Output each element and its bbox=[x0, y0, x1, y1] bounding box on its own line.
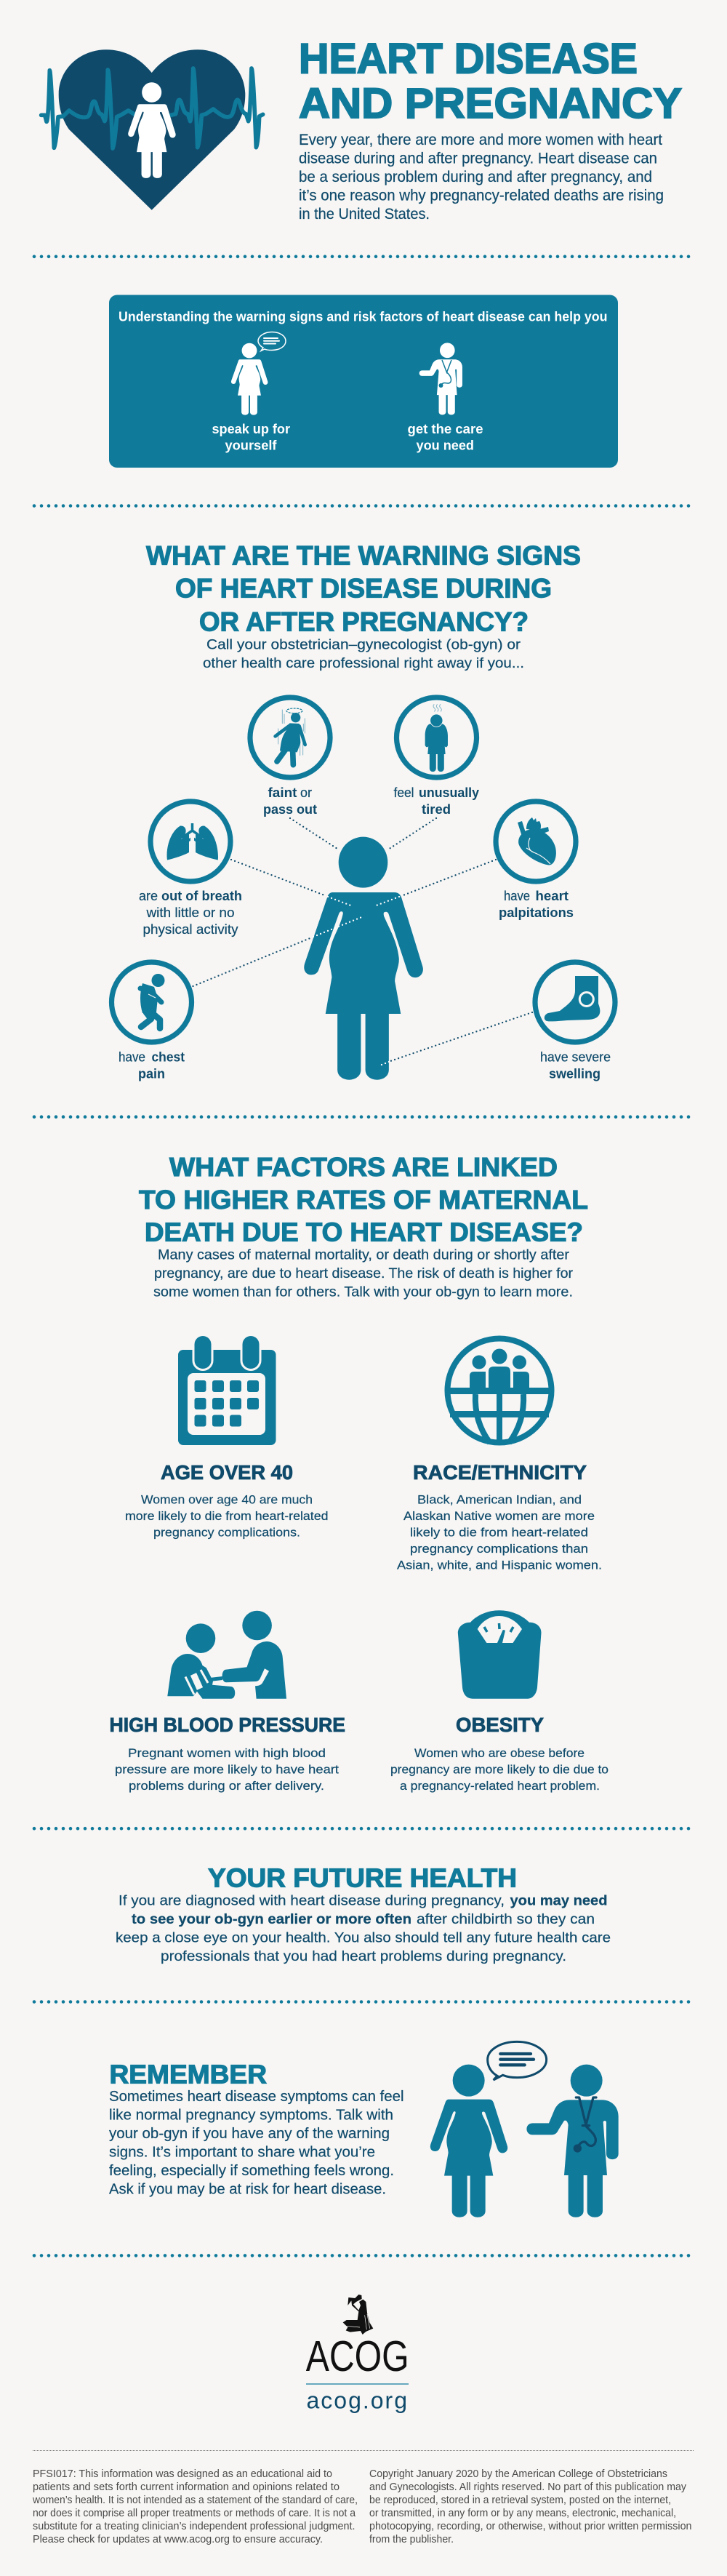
intro paragraph: be a serious problem during and after pregnancy, and bbox=[299, 169, 652, 185]
remember text: like normal pregnancy symptoms. Talk with bbox=[109, 2106, 393, 2124]
heading: warning signs: OR AFTER PREGNANCY? bbox=[199, 607, 529, 637]
footer: disclaimer: nor does it comprise all proper treatments or methods of care. It is not a bbox=[33, 2508, 356, 2519]
label: get the care you need: you need bbox=[416, 438, 474, 452]
footer: copyright bbox=[369, 2468, 692, 2545]
icon: heart with heartbeat and woman bbox=[41, 49, 263, 210]
label: are bbox=[139, 889, 158, 903]
heading: factors: TO HIGHER RATES OF MATERNAL bbox=[139, 1185, 588, 1215]
factors intro text bbox=[153, 1247, 573, 1300]
future health text: to see your ob-gyn earlier or more often bbox=[132, 1912, 411, 1927]
label bbox=[139, 889, 242, 937]
footer: disclaimer: PFSI017: This information was designed as an educational aid to bbox=[33, 2468, 332, 2480]
future health text: If you are diagnosed with heart disease during pregnancy, bbox=[119, 1894, 505, 1908]
illustration: patient talking with doctor bbox=[430, 2041, 619, 2217]
future health text: professionals that you had heart problems during pregnancy. bbox=[161, 1949, 566, 1964]
label bbox=[540, 1050, 611, 1081]
icon: woman speaking bbox=[231, 332, 286, 415]
icon: swollen foot bbox=[545, 976, 600, 1021]
intro paragraph: Every year, there are more and more women with heart bbox=[299, 132, 662, 148]
label: palpitations bbox=[499, 905, 574, 920]
icon: doctor bbox=[419, 343, 462, 415]
icon: lungs bbox=[167, 823, 218, 860]
icon: weight scale bbox=[458, 1610, 541, 1699]
remember text: signs. It’s important to share what you’re bbox=[109, 2144, 375, 2160]
sign: unusually tired bbox=[394, 697, 479, 817]
icon: calendar bbox=[178, 1335, 276, 1445]
callout heading: Understanding the warning signs and risk factors of heart disease can help you bbox=[119, 310, 608, 324]
label: out of breath bbox=[161, 889, 242, 903]
heading: warning signs: WHAT ARE THE WARNING SIGNS bbox=[146, 541, 581, 570]
footer: disclaimer: patients and sets forth current information and opinions related to bbox=[33, 2481, 340, 2493]
heading: factors: DEATH DUE TO HEART DISEASE? bbox=[145, 1217, 583, 1247]
label: have bbox=[119, 1050, 145, 1065]
factor text: Women over age 40 are much bbox=[141, 1492, 313, 1507]
icon: anatomical heart bbox=[518, 817, 556, 865]
warning signs intro text bbox=[203, 637, 524, 671]
label: pain bbox=[138, 1066, 165, 1081]
label: heart bbox=[535, 889, 569, 903]
remember text bbox=[109, 2088, 404, 2198]
factor text bbox=[390, 1746, 608, 1793]
factor heading: RACE/ETHNICITY bbox=[413, 1461, 587, 1484]
sign: faint or pass out bbox=[250, 697, 330, 817]
factor heading: AGE OVER 40 bbox=[161, 1461, 293, 1484]
icon: doctor with stethoscope bbox=[526, 2065, 619, 2217]
title bbox=[299, 35, 682, 127]
factor text: a pregnancy-related heart problem. bbox=[400, 1779, 600, 1793]
factor text: likely to die from heart-related bbox=[410, 1526, 588, 1539]
factor text: Alaskan Native women are more bbox=[403, 1509, 595, 1523]
label bbox=[394, 785, 479, 817]
intro paragraph: disease during and after pregnancy. Heart disease can bbox=[299, 150, 657, 167]
footer: copyright: from the publisher. bbox=[369, 2534, 454, 2545]
remember text: Ask if you may be at risk for heart disease. bbox=[109, 2180, 386, 2198]
sign: heart palpitations bbox=[496, 801, 576, 920]
factor text: Asian, white, and Hispanic women. bbox=[397, 1558, 602, 1572]
heading: factors: WHAT FACTORS ARE LINKED bbox=[169, 1152, 558, 1182]
label: get the care you need: get the care bbox=[407, 422, 483, 436]
label: chest bbox=[151, 1050, 185, 1065]
sign: out of breath bbox=[139, 801, 242, 937]
label: physical activity bbox=[142, 922, 238, 937]
label: speak up for yourself: speak up for bbox=[212, 422, 290, 436]
footer: disclaimer: Please check for updates at www.acog.org to ensure accuracy. bbox=[33, 2534, 323, 2545]
logo wordmark: ACOG bbox=[306, 2332, 409, 2380]
icon: pregnant woman bbox=[430, 2065, 507, 2217]
future health text bbox=[116, 1894, 611, 1964]
factor text: more likely to die from heart-related bbox=[125, 1509, 329, 1523]
label: feel bbox=[394, 785, 414, 800]
future health text: you may need bbox=[510, 1894, 608, 1908]
icon: tired woman bbox=[425, 704, 448, 769]
factor: race and ethnicity bbox=[397, 1338, 602, 1572]
warning signs intro text: other health care professional right away if you... bbox=[203, 656, 524, 671]
factor: high blood pressure bbox=[109, 1611, 345, 1793]
factor text bbox=[125, 1492, 329, 1539]
future health text: after childbirth so they can bbox=[417, 1912, 595, 1927]
remember text: feeling, especially if something feels wrong. bbox=[109, 2162, 394, 2179]
label: swelling bbox=[549, 1066, 601, 1081]
factor heading: OBESITY bbox=[456, 1713, 544, 1736]
icon: globe with people bbox=[445, 1338, 554, 1443]
icon: person holding chest bbox=[140, 974, 164, 1028]
label: tired bbox=[422, 802, 451, 817]
heading: remember: REMEMBER bbox=[109, 2060, 267, 2089]
intro paragraph: in the United States. bbox=[299, 206, 430, 223]
factor: age over 40 bbox=[125, 1335, 329, 1539]
heading: warning signs: OF HEART DISEASE DURING bbox=[175, 573, 552, 604]
factors intro text: pregnancy, are due to heart disease. The risk of death is higher for bbox=[154, 1265, 573, 1281]
factor heading: HIGH BLOOD PRESSURE bbox=[109, 1713, 345, 1736]
label bbox=[119, 1050, 185, 1081]
heading: warning signs bbox=[146, 541, 581, 637]
label: get the care you need bbox=[407, 422, 483, 452]
factor text bbox=[115, 1746, 339, 1793]
panel: understanding callout bbox=[109, 295, 618, 468]
intro paragraph bbox=[299, 132, 664, 223]
footer: disclaimer: women’s health. It is not intended as a statement of the standard of care, bbox=[32, 2495, 358, 2506]
factor text: pressure are more likely to have heart bbox=[115, 1763, 339, 1776]
connector lines bbox=[193, 818, 532, 1066]
sign: chest pain bbox=[112, 962, 192, 1081]
footer: copyright: and Gynecologists. All rights reserved. No part of this publication may bbox=[369, 2481, 687, 2493]
factors intro text: Many cases of maternal mortality, or death during or shortly after bbox=[158, 1247, 570, 1263]
label: or bbox=[300, 785, 312, 800]
icon: fainting woman bbox=[276, 708, 305, 765]
title: AND PREGNANCY bbox=[299, 80, 682, 127]
heading: factors bbox=[139, 1152, 588, 1247]
label: pass out bbox=[263, 802, 317, 817]
icon: blood pressure check bbox=[167, 1611, 286, 1699]
factor: obesity bbox=[390, 1610, 608, 1793]
factor text bbox=[397, 1492, 602, 1572]
warning signs intro text: Call your obstetrician–gynecologist (ob-gyn) or bbox=[206, 637, 521, 653]
factor text: pregnancy are more likely to die due to bbox=[390, 1763, 608, 1776]
label: have severe bbox=[540, 1050, 611, 1065]
factor text: Pregnant women with high blood bbox=[128, 1746, 326, 1760]
footer: copyright: photocopying, recording, or otherwise, without prior written permission bbox=[369, 2521, 692, 2532]
central pregnant woman figure bbox=[304, 837, 423, 1080]
factors intro text: some women than for others. Talk with your ob-gyn to learn more. bbox=[153, 1284, 573, 1300]
footer: disclaimer: substitute for a treating clinician’s independent professional judgment. bbox=[33, 2521, 355, 2532]
icon: speech bubble bbox=[488, 2041, 547, 2080]
factor text: pregnancy complications. bbox=[153, 1526, 300, 1539]
footer: disclaimer bbox=[32, 2468, 358, 2545]
remember text: your ob-gyn if you have any of the warning bbox=[109, 2125, 390, 2142]
label: speak up for yourself: yourself bbox=[225, 438, 278, 452]
website: acog.org bbox=[307, 2388, 407, 2414]
label: faint bbox=[268, 785, 297, 800]
factor text: Women who are obese before bbox=[414, 1746, 585, 1760]
intro paragraph: it’s one reason why pregnancy-related deaths are rising bbox=[299, 188, 664, 204]
factor text: Black, American Indian, and bbox=[417, 1492, 582, 1507]
title: HEART DISEASE bbox=[299, 35, 638, 83]
factor text: problems during or after delivery. bbox=[129, 1779, 324, 1793]
label: unusually bbox=[419, 785, 479, 800]
future health text: keep a close eye on your health. You also should tell any future health care bbox=[116, 1930, 611, 1946]
label bbox=[263, 785, 317, 817]
sign: severe swelling bbox=[535, 962, 615, 1081]
footer: copyright: be reproduced, stored in a retrieval system, posted on the internet, bbox=[369, 2495, 671, 2506]
footer: copyright: Copyright January 2020 by the American College of Obstetricians bbox=[369, 2468, 667, 2480]
label: have bbox=[504, 889, 530, 903]
label: speak up for yourself bbox=[212, 422, 290, 452]
logo: ACOG bbox=[306, 2295, 409, 2414]
label: with little or no bbox=[145, 905, 234, 920]
footer: copyright: or transmitted, in any form or by any means, electronic, mechanical, bbox=[369, 2508, 676, 2519]
heading: your future health: YOUR FUTURE HEALTH bbox=[208, 1863, 517, 1893]
factor text: pregnancy complications than bbox=[410, 1542, 588, 1556]
label bbox=[499, 889, 574, 920]
logo figure: mother and child bbox=[343, 2295, 373, 2335]
remember text: Sometimes heart disease symptoms can feel bbox=[109, 2088, 404, 2105]
